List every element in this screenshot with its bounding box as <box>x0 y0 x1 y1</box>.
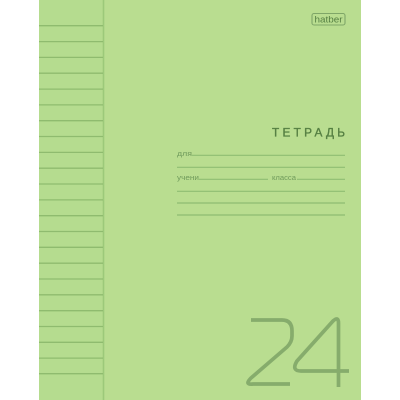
panel: left ruled margin strip <box>39 0 104 400</box>
logo: hatber: hatber <box>314 15 342 26</box>
label: student: учени <box>177 175 199 182</box>
form: name and class fields <box>177 151 345 215</box>
writing lines <box>177 155 345 215</box>
digit 4 <box>295 319 349 387</box>
title: notebook: ТЕТРАДЬ <box>272 126 345 140</box>
label: class: класса <box>272 175 296 182</box>
page count: 24 <box>248 319 349 387</box>
digit 2 <box>248 320 292 384</box>
label: for: для <box>177 151 192 158</box>
